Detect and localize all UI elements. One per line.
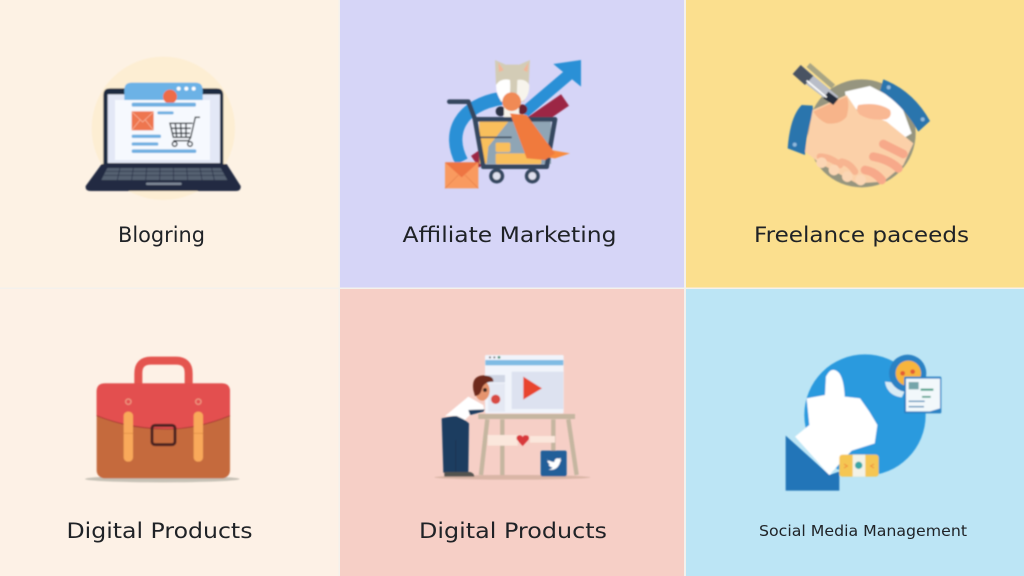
- label: blogging: Blogring: [118, 223, 205, 247]
- label: affiliate marketing: Affiliate Marketing: [402, 223, 616, 247]
- label: freelance: Freelance paceeds: [754, 223, 969, 247]
- icon: laptop with blog page and shopping cart: [86, 57, 241, 200]
- icon: man at table with video window and twitter badge: [434, 355, 590, 480]
- panel: blogging: [0, 0, 338, 288]
- panel: social media management: [686, 289, 1024, 576]
- label: digital products: Digital Products: [66, 519, 252, 543]
- icon: briefcase: [85, 361, 240, 482]
- label: digital products: Digital Products: [419, 519, 607, 543]
- panel: freelance: [686, 0, 1024, 288]
- panel: digital products video: [340, 289, 684, 576]
- panel: affiliate marketing: [340, 0, 684, 288]
- icon: thumbs up on blue circle with badges: [786, 354, 941, 491]
- icon: cat in shopping cart with growth arrow: [445, 60, 581, 188]
- icon: handshake with pen: [788, 65, 930, 187]
- panel: digital products briefcase: [0, 289, 338, 576]
- label: social media management: Social Media Management: [759, 522, 967, 540]
